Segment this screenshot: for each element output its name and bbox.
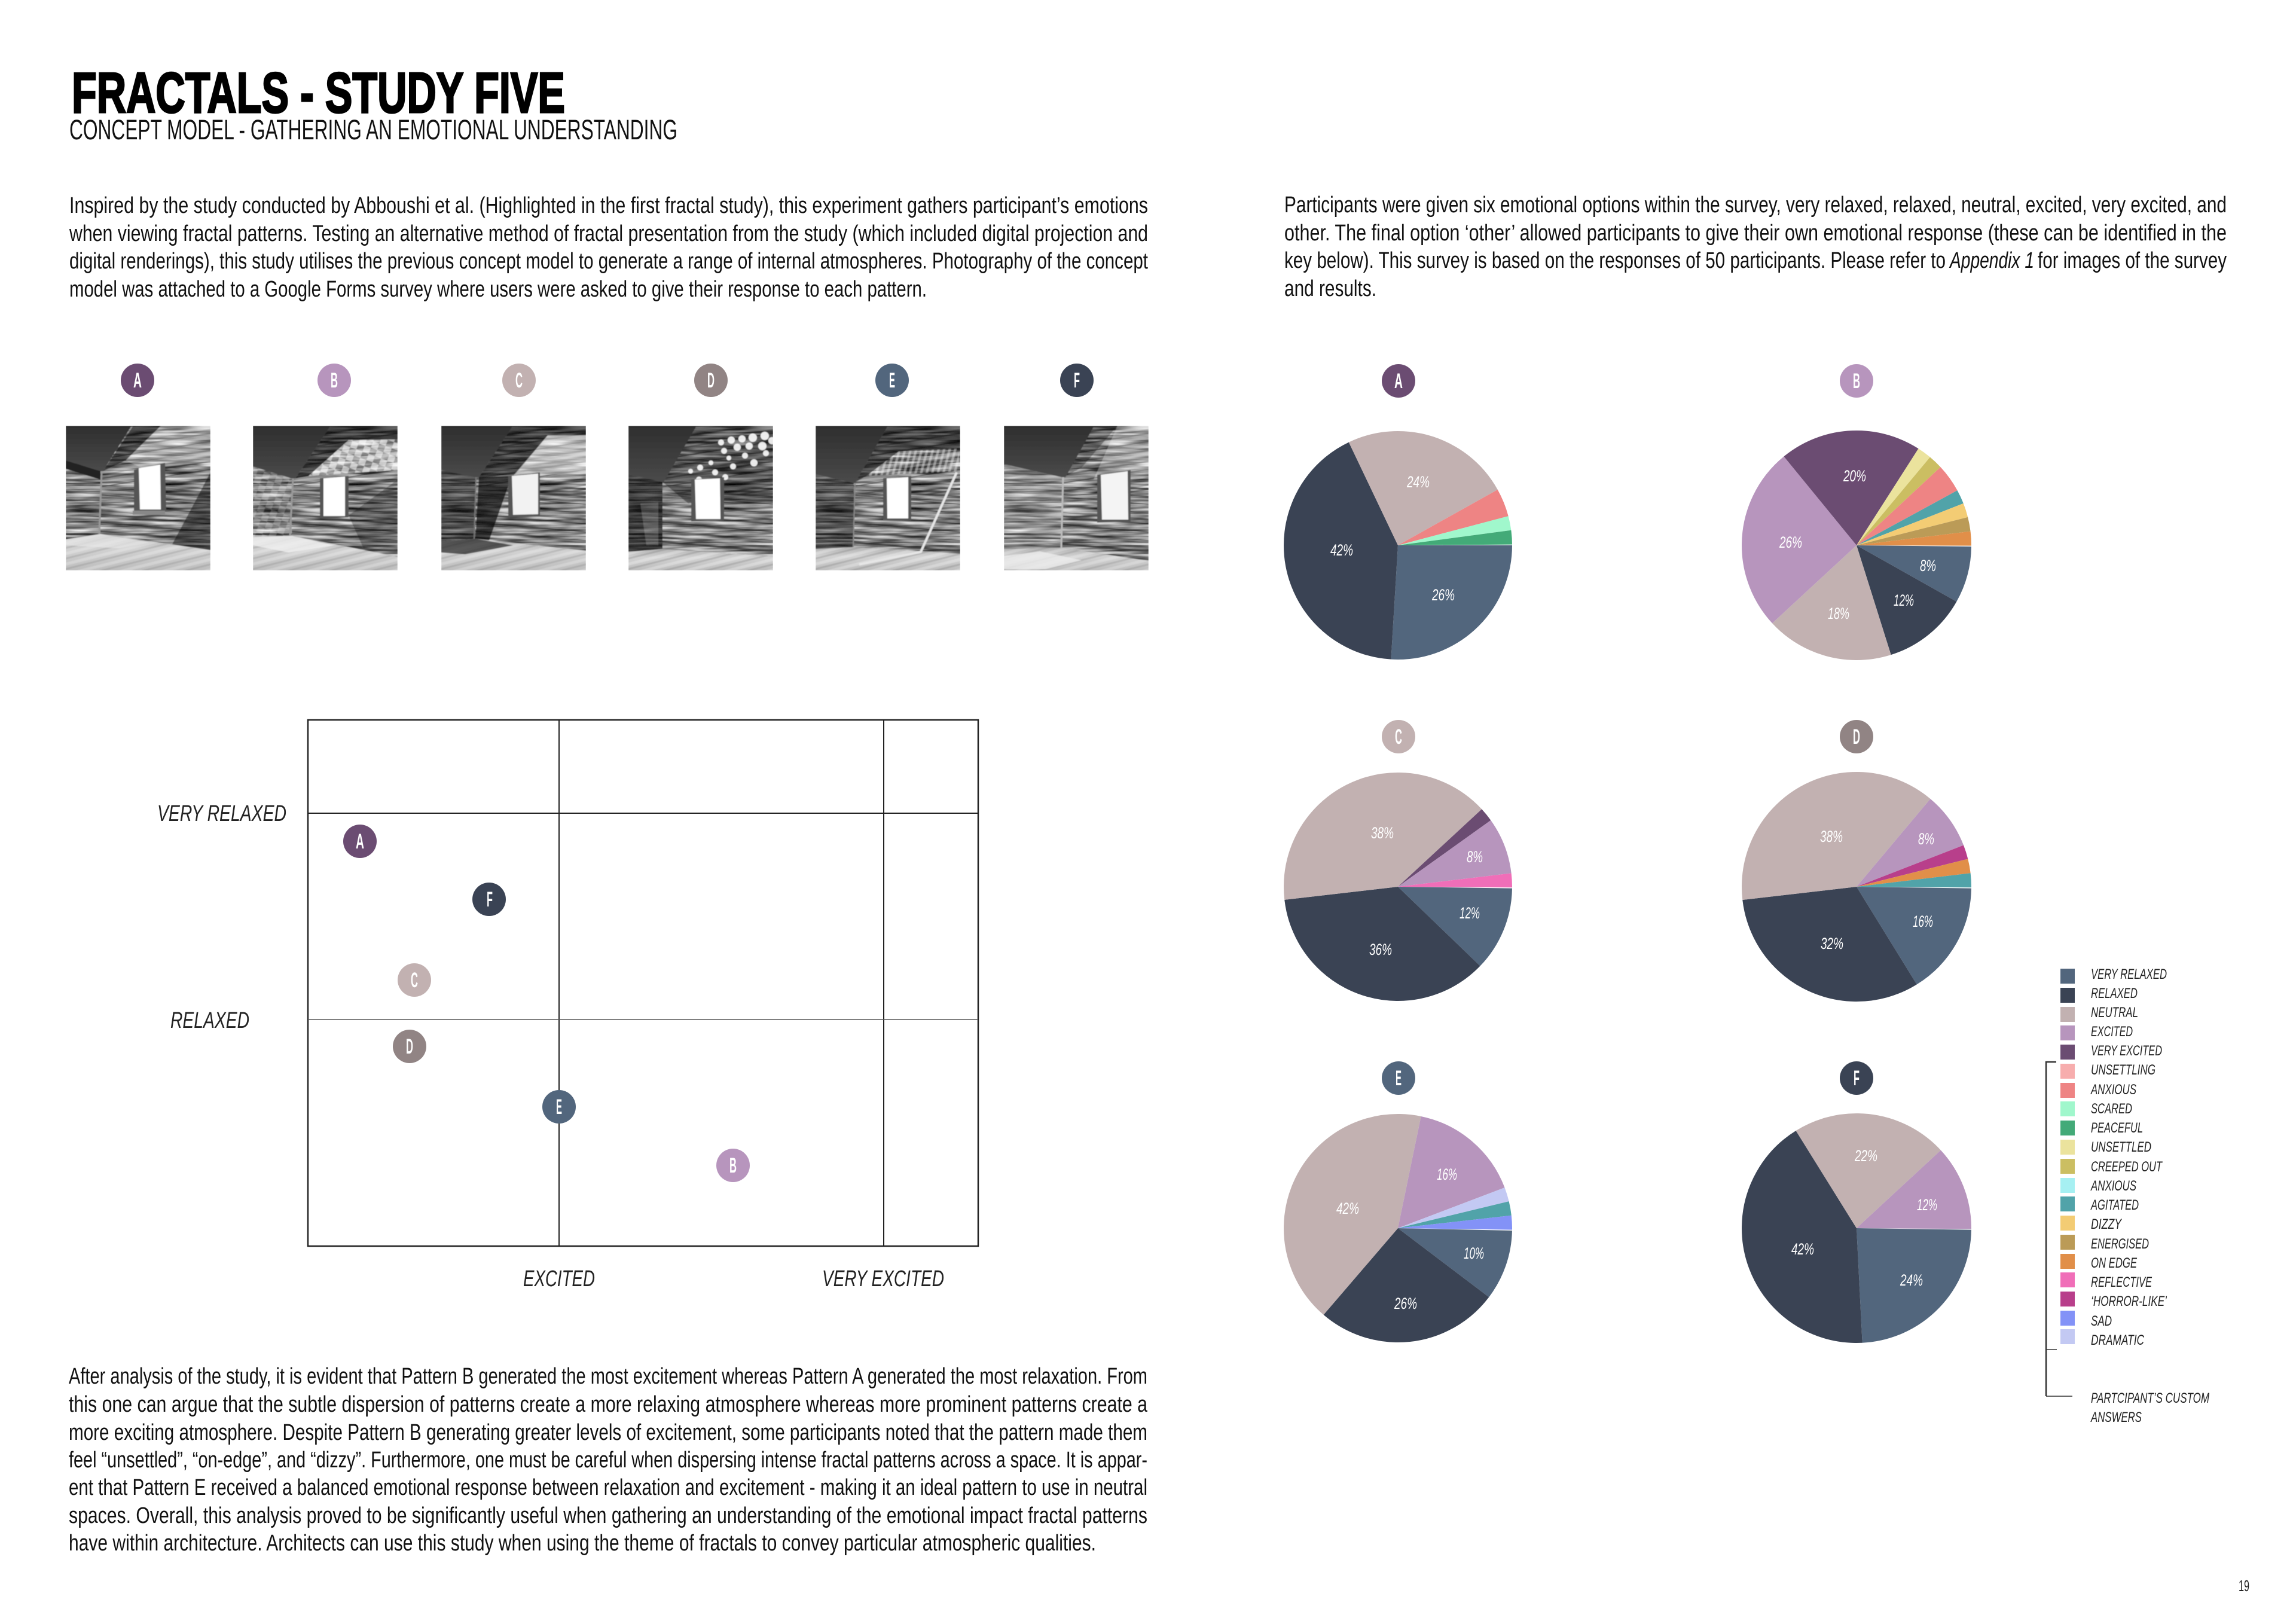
subtitle: CONCEPT MODEL - GATHERING AN EMOTIONAL UNDERSTANDING [69,114,677,145]
pie badge B: B [1853,370,1860,393]
pie chart A: 26% [1431,586,1455,604]
point E: E [556,1095,562,1119]
legend: energised: ENERGISED [2091,1236,2149,1252]
bracket: custom answers [2046,1062,2072,1396]
pie badge F [1840,1061,1873,1095]
badge E [875,364,909,397]
legend: very excited: VERY EXCITED [2091,1043,2162,1059]
intro text block: digital renderings), this study utilises the previous concept model to generate a range of internal atmospheres. Photography of the concept [69,249,1148,274]
point A [343,825,377,858]
pie chart B: 8% [1920,557,1936,575]
legend: peaceful: PEACEFUL [2091,1120,2143,1136]
pie chart D: 38% [1820,828,1843,845]
legend [2046,966,2209,1425]
pie chart E: 10% [1464,1244,1484,1262]
legend: anxious [2060,1178,2136,1194]
legend: agitated: AGITATED [2090,1197,2139,1213]
pie chart C: 36% [1369,941,1392,958]
legend: unsettled [2060,1139,2151,1155]
point C: C [411,969,418,992]
legend: very excited [2060,1043,2162,1060]
legend: sad [2060,1311,2112,1329]
survey description text block [1284,193,2227,301]
point F: F [487,888,493,911]
pie chart A: 42% [1330,541,1353,559]
pie badge C: C [1395,725,1402,749]
legend: neutral: NEUTRAL [2091,1005,2138,1021]
analysis text block: ent that Pattern E received a balanced emotional response between relaxation and excitement - making it an ideal pattern to use in neutral [69,1475,1147,1500]
title: FRACTALS - STUDY FIVE [72,61,565,125]
legend: scared [2060,1101,2132,1117]
photo F: concept model interior [1004,426,1149,570]
legend: anxious: ANXIOUS [2090,1082,2136,1098]
gridline: very relaxed [308,813,978,814]
point B [716,1149,750,1182]
legend: peaceful [2060,1120,2143,1136]
legend: sad: SAD [2091,1313,2112,1329]
legend: scared: SCARED [2091,1101,2132,1117]
photo E: concept model interior [816,426,960,570]
point B: B [729,1154,737,1177]
pie chart E [1336,1165,1484,1312]
pie chart F: 22% [1854,1147,1877,1165]
badge A: A [133,369,142,392]
pie chart D [1799,828,1934,953]
pie chart C: 8% [1467,848,1483,866]
intro text block: model was attached to a Google Forms survey where users were asked to give their response to each pattern. [69,277,927,302]
pie chart E: 26% [1394,1295,1417,1312]
axis label: very relaxed: VERY RELAXED [157,801,286,826]
legend: dramatic [2060,1329,2144,1348]
legend note: participant custom answers: PARTCIPANT’S CUSTOM [2091,1390,2209,1406]
legend: unsettled: UNSETTLED [2091,1139,2151,1155]
pie chart F: 24% [1900,1271,1923,1289]
survey description text block: and results. [1284,276,1376,301]
legend note: participant custom answers: ANSWERS [2090,1409,2142,1425]
analysis text block: After analysis of the study, it is evident that Pattern B generated the most excitement whereas Pattern A generated the most relaxation. From [69,1364,1147,1389]
badge C: C [515,369,523,392]
legend: unsettling [2060,1062,2155,1079]
legend: on edge: ON EDGE [2091,1255,2138,1271]
intro text block: Inspired by the study conducted by Abboushi et al. (Highlighted in the first fractal study), this experiment gathers participant’s emotions [69,193,1148,218]
legend: energised [2060,1235,2149,1252]
badge F: F [1074,369,1080,392]
gridline: excited [558,720,560,1246]
pie chart E: 42% [1336,1199,1359,1217]
analysis text block: this one can argue that the subtle dispersion of patterns create a more relaxing atmosphere whereas more prominent patterns create a [69,1392,1148,1417]
survey description text block: Appendix 1 [1949,248,2034,273]
analysis text block: more exciting atmosphere. Despite Pattern B generating greater levels of excitement, some participants noted that the pattern made them [69,1420,1147,1445]
pie badge D [1840,720,1873,753]
survey description text block: key below). This survey is based on the responses of 50 participants. Please refer to [1284,248,1946,273]
pie chart B: 18% [1828,605,1849,622]
scatter chart: emotional response matrix [157,720,978,1292]
pie chart A [1330,473,1455,604]
badge F [1060,364,1094,397]
pie chart B [1779,467,1936,622]
page number: 19 [2239,1577,2249,1595]
photo C: concept model interior [441,426,586,570]
legend: anxious: ANXIOUS [2090,1178,2136,1194]
axis label: excited: EXCITED [523,1266,595,1292]
legend: creeped out: CREEPED OUT [2091,1159,2163,1175]
pie chart A: 24% [1406,473,1430,491]
pie badge E: E [1396,1067,1402,1090]
legend: agitated [2060,1196,2139,1213]
pie badge A [1382,364,1415,398]
pie chart E: 16% [1437,1165,1457,1183]
legend: dizzy: DIZZY [2091,1216,2122,1232]
photo B: concept model interior [253,426,398,570]
axis label: very excited: VERY EXCITED [822,1266,944,1292]
pie chart C: 12% [1460,904,1480,922]
pie badge F: F [1854,1067,1860,1090]
badge D: D [707,369,715,392]
legend: anxious [2060,1082,2136,1098]
legend: reflective [2060,1272,2152,1290]
legend: horror-like: ‘HORROR-LIKE’ [2091,1293,2167,1309]
legend: dizzy [2060,1216,2122,1232]
badge B [317,364,351,397]
legend: dramatic: DRAMATIC [2091,1332,2144,1348]
pie chart B: 12% [1894,591,1914,609]
analysis text block: have within architecture. Architects can use this study when using the theme of fractals to convey particular atmospheric qualities. [69,1531,1096,1556]
point F [472,883,506,916]
pattern badges row [121,364,1094,397]
analysis text block: feel “unsettled”, “on-edge”, and “dizzy”. Furthermore, one must be careful when dispersing intense fractal patterns across a space. It is appar- [69,1448,1147,1473]
badge E: E [889,369,895,392]
legend: unsettling: UNSETTLING [2091,1062,2155,1078]
survey description text block: for images of the survey [2038,248,2227,273]
legend: relaxed: RELAXED [2091,985,2138,1002]
axis label: relaxed: RELAXED [170,1008,249,1033]
gridline: relaxed [308,1019,978,1020]
gridline: very excited [883,720,884,1246]
point E [542,1090,576,1124]
photo D: concept model interior [628,426,775,570]
pie chart F [1791,1147,1937,1289]
pie chart C [1340,824,1483,958]
pie chart D: 8% [1918,830,1934,848]
pie chart B: 26% [1779,533,1802,551]
pie badge E [1382,1061,1415,1095]
legend: excited: EXCITED [2091,1024,2133,1040]
point A: A [356,830,364,853]
pie badge A: A [1394,370,1403,393]
photo A: concept model interior [66,426,210,570]
chart frame [308,720,978,1246]
intro text block [69,193,1148,302]
pie badge D: D [1853,725,1860,749]
analysis text block: spaces. Overall, this analysis proved to be significantly useful when gathering an understanding of the emotional impact fractal patterns [69,1503,1147,1528]
pie chart C: 38% [1371,824,1394,842]
badge A [121,364,154,397]
legend: creeped out [2060,1159,2163,1175]
point D: D [406,1035,413,1058]
legend: neutral [2060,1005,2138,1022]
legend: reflective: REFLECTIVE [2091,1274,2152,1290]
pie badge B [1840,364,1873,398]
legend: very relaxed [2060,966,2167,984]
legend: excited [2060,1024,2133,1040]
point D [393,1030,426,1063]
legend note: participant custom answers [2090,1390,2209,1425]
legend: very relaxed: VERY RELAXED [2091,966,2167,982]
badge B: B [331,369,338,392]
legend: horror-like [2060,1292,2167,1309]
pie badge C [1382,720,1415,753]
point C [398,963,431,997]
badge D [694,364,728,397]
pie chart F: 42% [1791,1240,1814,1258]
pie chart D: 16% [1913,912,1933,930]
legend: on edge [2060,1254,2138,1271]
pie chart D: 32% [1821,935,1843,953]
badge C [502,364,536,397]
pie chart B: 20% [1843,467,1866,485]
intro text block: when viewing fractal patterns. Testing an alternative method of fractal presentation from the study (which included digital projection and [69,221,1148,246]
legend: relaxed [2060,985,2138,1003]
pie chart F: 12% [1917,1196,1937,1214]
analysis text block [69,1364,1148,1556]
